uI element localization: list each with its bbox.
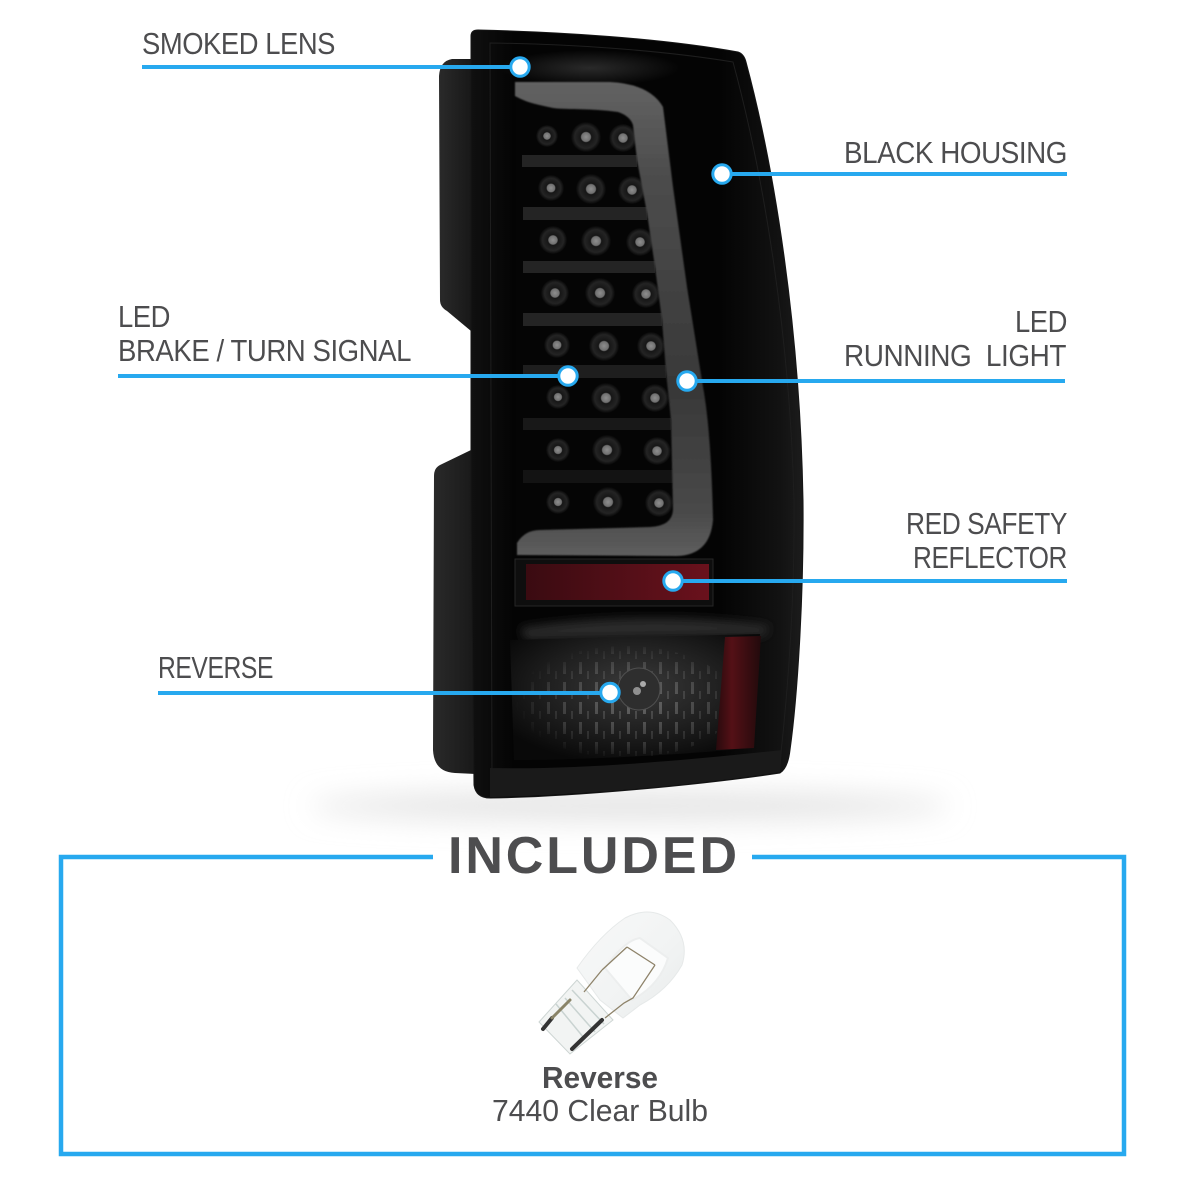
rear housing upper [439,59,471,331]
lower lens sheen [520,618,770,640]
amber side strip [716,636,761,750]
bulb filament wires [584,947,655,1018]
bulb inner highlight [605,938,668,1000]
LED bulbs [536,122,673,517]
rear housing lower [433,450,476,774]
callout: LED running light: RUNNING LIGHT [844,338,1066,373]
callout: black housing: BLACK HOUSING [844,135,1067,170]
LED panel [516,95,673,545]
bulb contact leads [543,1000,602,1049]
red safety reflector [526,564,709,600]
bottom lens band [490,750,782,797]
callout: red safety reflector [664,506,1067,590]
callout: red safety reflector: RED SAFETY [906,506,1067,541]
caption: bulb type: 7440 Clear Bulb [492,1093,708,1128]
reverse lens [510,634,760,760]
icon: 7440 clear bulb [539,912,684,1054]
callout: reverse [158,650,619,702]
upper lens glow [500,50,680,86]
callout: LED running light [678,304,1067,390]
callout: reverse: REVERSE [158,650,273,685]
lens body [471,30,803,798]
callout: LED brake / turn signal [118,299,577,385]
panel: included box [61,857,1124,1154]
reverse bulb [618,668,660,710]
callout: LED brake / turn signal: LED [118,299,170,334]
bulb glass envelope [577,912,684,1018]
running light bar [515,82,713,556]
LED divider slats [522,155,673,483]
callout: smoked lens: SMOKED LENS [142,26,335,61]
bulb base [539,980,613,1054]
bulb base ribs [556,990,604,1038]
floor shadow [310,792,950,820]
callout: LED brake / turn signal: BRAKE / TURN SIGNAL [118,333,411,368]
reflector frame [515,559,713,606]
heading: included: INCLUDED [448,827,737,885]
caption: reverse: Reverse [542,1060,658,1095]
callout: LED running light: LED [1015,304,1067,339]
lens inner trim [490,43,794,786]
callout: black housing [713,135,1067,183]
callout: red safety reflector: REFLECTOR [913,540,1067,575]
tail light product [310,30,950,820]
callout: smoked lens [142,26,529,76]
reverse lens ribs [531,646,717,756]
